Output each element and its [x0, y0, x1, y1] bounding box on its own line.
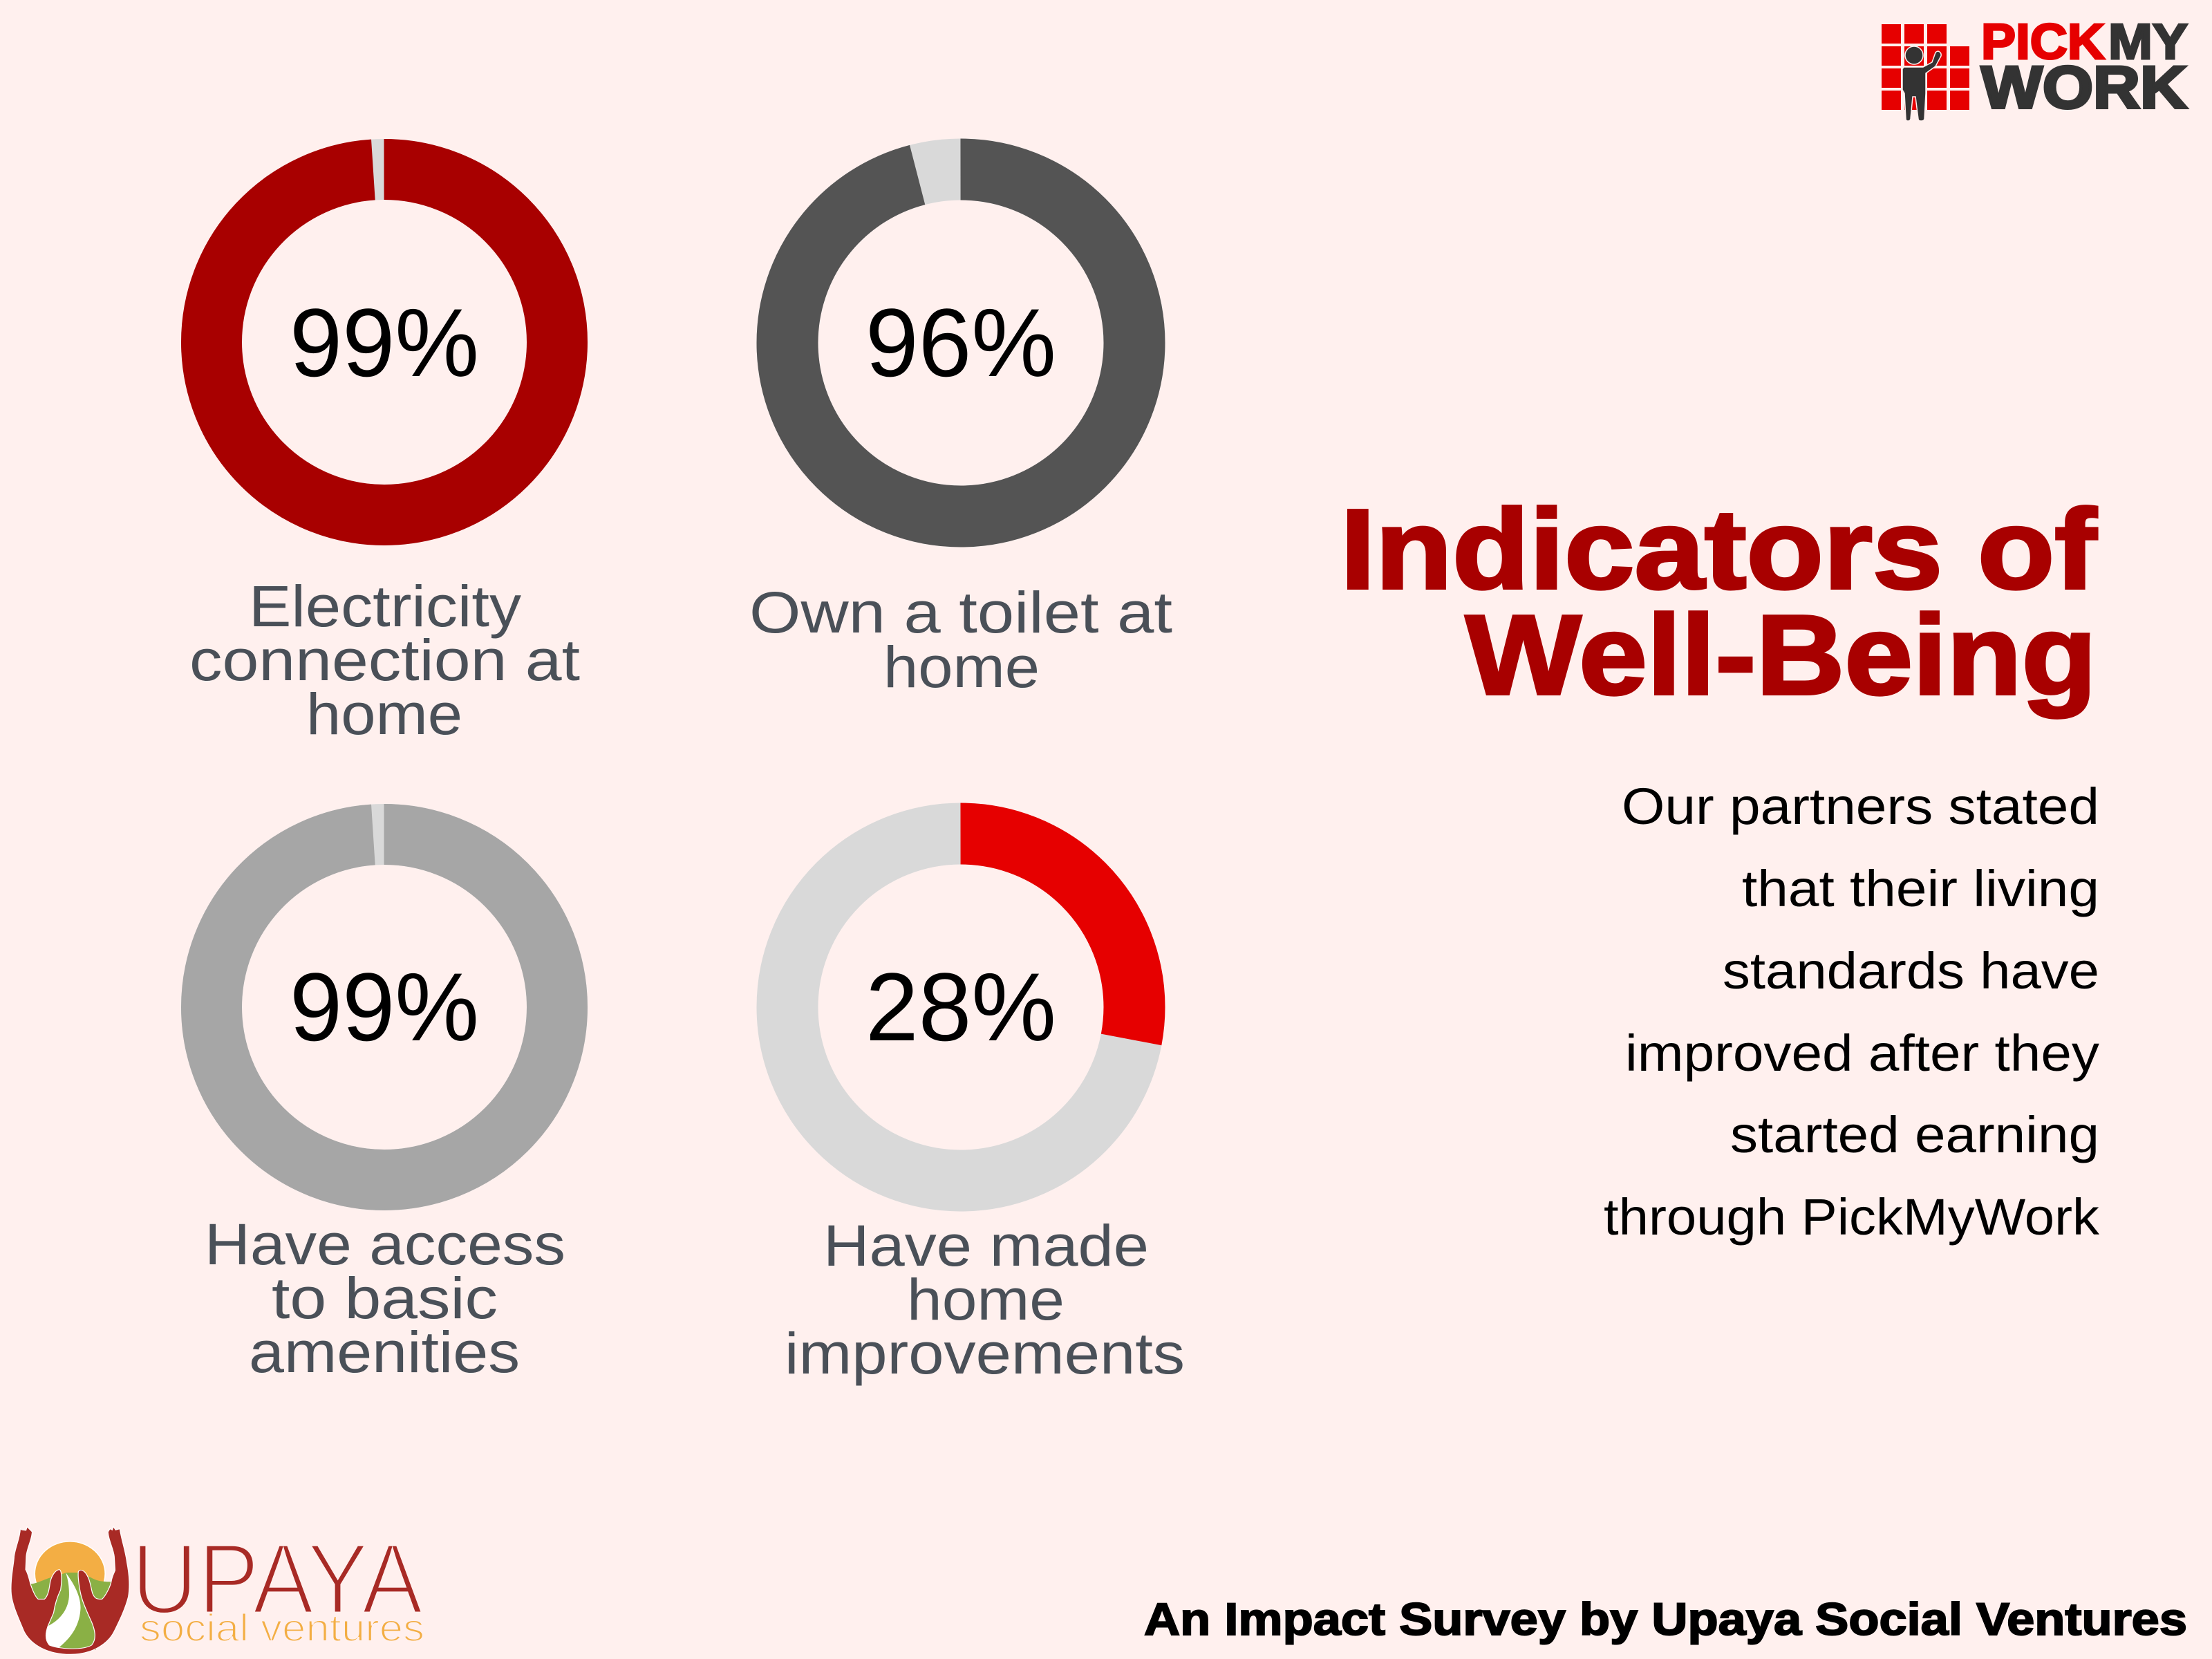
wordmark: social ventures: social ventures [140, 1606, 424, 1649]
donut chart: electricity 99% [212, 169, 557, 515]
body text: improved after they [1625, 1024, 2099, 1082]
body text: through PickMyWork [1604, 1188, 2100, 1246]
label: have made home improvements: improvements [785, 1321, 1185, 1386]
logo: PickMyWork: WORK [1981, 55, 2187, 121]
value: 28%: 28% [865, 953, 1056, 1061]
value: 99%: 99% [290, 953, 479, 1061]
body text: that their living [1742, 860, 2099, 917]
label: electricity connection at home: home [306, 682, 462, 747]
donut chart: basic amenities 99% [212, 834, 557, 1180]
label: own a toilet at home: home [883, 635, 1040, 700]
label: own a toilet at home: Own a toilet at [749, 580, 1172, 645]
label: have access to basic amenities: Have access [205, 1212, 565, 1277]
label: electricity connection at home: Electricity [249, 574, 521, 639]
wordmark: UPAYA: UPAYA [131, 1523, 423, 1635]
logo: Upaya Social Ventures [11, 1523, 424, 1654]
label: have made home improvements [785, 1213, 1185, 1386]
label: electricity connection at home [189, 574, 580, 747]
logo: PickMyWork: PICK [1981, 15, 2105, 70]
body text: Our partners stated [1622, 778, 2099, 835]
body text [1604, 778, 2100, 1246]
donut chart: toilet 96% [787, 169, 1134, 516]
title: Indicators of [1340, 486, 2097, 612]
label: have made home improvements: Have made [823, 1213, 1149, 1278]
label: have access to basic amenities: to basic [272, 1266, 498, 1331]
title: Well-Being [1465, 592, 2097, 718]
footer credit: An Impact Survey by Upaya Social Ventures [1144, 1593, 2187, 1644]
body text: started earning [1730, 1106, 2099, 1163]
value: 99%: 99% [290, 288, 479, 397]
icon: hands, sun and road [11, 1526, 129, 1654]
logo: PickMyWork: MY [2108, 15, 2188, 70]
body text: standards have [1723, 942, 2099, 1000]
label: have access to basic amenities: amenities [249, 1320, 520, 1385]
donut chart: home improvements 28% [787, 834, 1134, 1181]
label: own a toilet at home [749, 580, 1172, 700]
value: 96%: 96% [865, 288, 1056, 397]
label: electricity connection at home: connection at [189, 628, 580, 693]
label: have made home improvements: home [907, 1267, 1065, 1332]
label: have access to basic amenities [205, 1212, 565, 1385]
logo: PickMyWork [1882, 15, 2188, 121]
title [1340, 486, 2097, 718]
